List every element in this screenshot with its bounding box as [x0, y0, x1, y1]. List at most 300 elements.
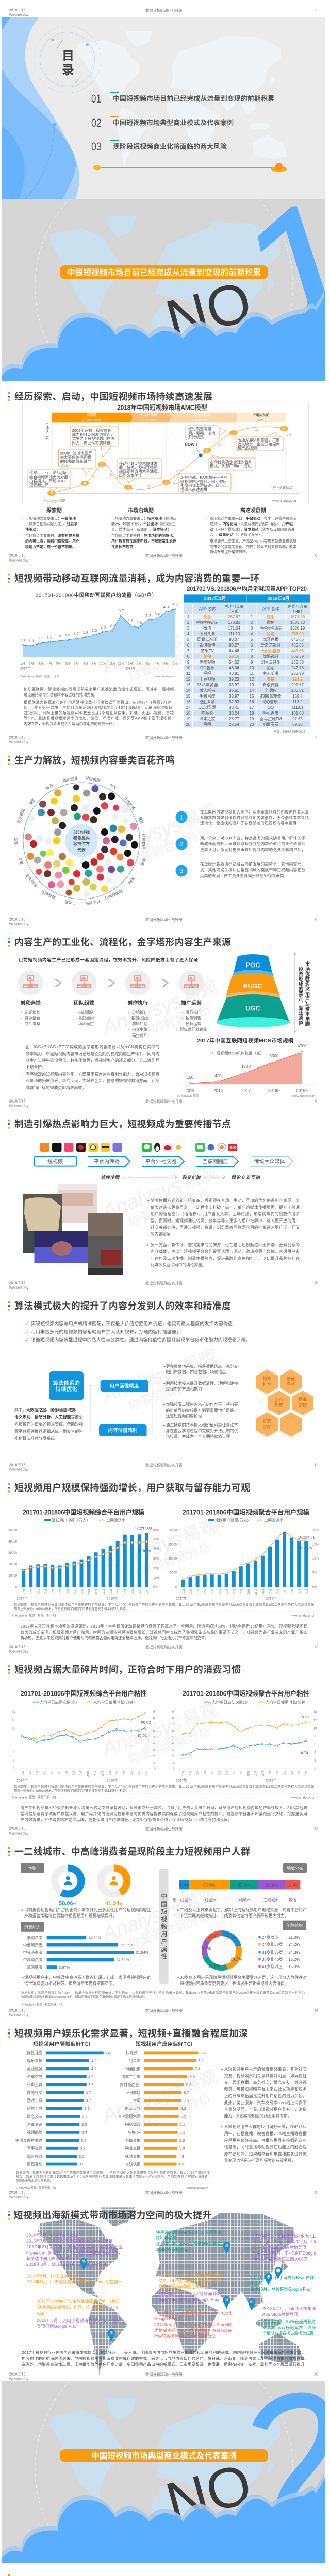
text: region: 二线及以上城市贡献了六成以上的短视频用户地域来源，随着平台用户 [180, 1907, 307, 1912]
area chart: mobile traffic per user: 1.5 [56, 634, 61, 638]
annotations: North America: 2017年8月，LIKE在美国上线 [26, 2274, 81, 2279]
annotations: North America: 其全球注册用户已超过2.4亿 [26, 2256, 78, 2261]
footer: 9 [315, 1098, 317, 1104]
table: APP traffic TOP20: 美拍 [203, 654, 211, 659]
radial diagram: vertical content providers: 教育 [138, 816, 145, 825]
process steps: · [21, 1010, 22, 1014]
AMC chart: 综合视频网站大力发展 [29, 474, 68, 479]
table: APP traffic TOP20: 响屏看看 [262, 722, 279, 727]
data note: © Analysys 易观 · 易观千帆 · A3 [12, 1795, 57, 1799]
annotations: Japan and Korea: 国上线 [250, 2281, 263, 2286]
table: APP traffic TOP20: 9 [187, 660, 189, 665]
data note: 在智能手机上的行为轨迹。 [16, 2178, 53, 2182]
panel: content production [8, 937, 317, 1108]
text block: algorithm measures: 身在自我学习过程中完成对算法机制的优 [166, 1428, 238, 1433]
table: APP traffic TOP20: 9 [251, 660, 253, 665]
footer: 2018/8/15 [9, 1462, 25, 1467]
chart: aggregator platforms users: 12月 [261, 1589, 265, 1596]
text block: spreading analysis: 值表达进入更高层次，一定程度上打破了单一、单向的媒体传播局面，提升了普通 [151, 1205, 300, 1210]
footer: 数据分析驱动业务升级 [145, 1099, 183, 1104]
AMC chart: D [127, 486, 129, 489]
pyramid: PGC PUGC UGC [217, 954, 290, 1027]
stage column: market launch [107, 507, 176, 549]
stage column: exploration: · [22, 517, 23, 520]
gender: donuts: 性别 [28, 1866, 37, 1871]
title: 短视频出海新模式带动市场潜力空间的极大提升 [13, 2210, 211, 2221]
stage column: high growth: · [206, 540, 207, 543]
footer [9, 2008, 318, 2018]
radial diagram: vertical content providers: 财经金融 [85, 775, 101, 783]
AMC chart: 端短视频应用大举涌现， [119, 469, 161, 474]
text block: pyramid analysis: 牌营销目标的完成更加精准高效。 [26, 1084, 86, 1090]
chart: comprehensive platforms users: 8月 [73, 1589, 76, 1594]
panel: AMC development stages: Analysys [98, 423, 185, 473]
text block: traffic analysis: · [19, 700, 20, 705]
process steps: · [74, 1016, 75, 1021]
AMC chart: H [283, 427, 286, 431]
banner: 中国短视频市场典型商业模式及代表案例 [91, 2451, 237, 2461]
region: stacked bar: 三线城市 [263, 1897, 279, 1902]
stage column: exploration: 件驱动； [25, 527, 40, 532]
bar chart: domain TGI: 3.9 [88, 2074, 93, 2079]
chart: aggregator platforms stickiness: 30 [172, 1749, 176, 1752]
footer: 数据分析驱动业务升级 [145, 1463, 183, 1467]
item 02: 中国短视频市场典型商业模式及代表案例 [113, 118, 234, 127]
annotations: North America: 2014年4月，Musical.ly上线 [26, 2233, 78, 2238]
age: donut: 36岁到40岁 [262, 1957, 283, 1962]
map pins [80, 2242, 282, 2342]
process steps: · [182, 1016, 183, 1021]
table: APP traffic TOP20: 4399游戏盒 [260, 693, 282, 699]
panel: algorithm distribution: 你要的数据分析 [127, 1370, 213, 1413]
bar chart: domain TGI: 情侣互动 [27, 2161, 43, 2166]
text block: spreading analysis: 另一方面，有传播、营销需求的品牌方，也在借助短视频这种更新潮、更具创意的 [151, 1242, 300, 1247]
annotations: India and Middle East: Google Play [154, 2316, 178, 2321]
bar chart: domain TGI: 3.2 [81, 2138, 86, 2143]
region: stacked bar: 超一线城市 [173, 1897, 192, 1902]
bar chart: domain TGI: 娱乐直播 [27, 2058, 43, 2063]
table: APP traffic TOP20: 54.52 [229, 660, 239, 665]
chart: aggregator platforms users: 0% [312, 1586, 317, 1589]
footer: 2018/8/15 [9, 1098, 25, 1104]
annotations: India and Middle East: 类榜单中拉力29个国家首位，在Google [154, 2328, 232, 2333]
chart: comprehensive platforms stickiness: 5月 [137, 1771, 140, 1776]
cloud [1, 290, 325, 381]
process steps: 内容审核 [132, 1027, 147, 1032]
annotations: North America: Flipagram；同年11月，今日头条全资收购Musical.ly， [26, 2250, 123, 2256]
table: APP traffic TOP20: 虎牙直播 [262, 637, 279, 642]
table: APP traffic TOP20: 微信 [203, 625, 211, 631]
honeycomb: distribution methods: 营销 [299, 1402, 307, 1408]
chart: aggregator platforms stickiness: 12 [314, 1719, 317, 1722]
AMC chart: 市场认可度 [44, 422, 49, 440]
honeycomb: distribution methods: 投放 [275, 1402, 283, 1408]
annotations: North America [26, 2233, 123, 2284]
AMC chart: IV [147, 485, 151, 488]
age: donut: 24岁到30岁 [262, 1942, 283, 1947]
table: APP traffic TOP20: 2 [187, 620, 189, 625]
table: APP traffic TOP20: 159.8 [292, 694, 303, 699]
AMC chart: 市场发展达到顶峰，厂商 [237, 437, 280, 443]
annotations: India and Middle East: 2018年3月，火山小视频海外版 [158, 2291, 221, 2296]
text block: spreading analysis: 内容载体，主动与短视频平台合作设置话题与活动，邀请视频自媒体、普通用户参 [151, 1249, 300, 1254]
chart: aggregator platforms stickiness: 6月 [218, 1771, 221, 1776]
bar chart: domain TGI [15, 2041, 110, 2167]
region: stacked bar: 22.9% [266, 1883, 278, 1888]
chart: comprehensive platforms users: 50% [153, 1538, 160, 1541]
stage column: exploration: 吸附力不足，商业价值不明晰。 [25, 544, 76, 549]
AMC chart: ©Analysys 易观 [43, 499, 65, 503]
chart: comprehensive platforms users [8, 1509, 160, 1600]
pyramid: PGC PUGC UGC: PUGC [243, 982, 263, 990]
region: stacked bar: 33.9% [203, 1883, 216, 1888]
table: APP traffic TOP20: 233.99 [291, 671, 304, 676]
bar chart: domain TGI: 婚恋交友 [27, 2114, 43, 2119]
footer: 数据分析驱动业务升级 [145, 553, 183, 558]
AMC chart: 拍客模式，带动UGC [29, 478, 65, 483]
stage column: exploration: 的内容生态，消费门槛较高，用户 [25, 539, 79, 543]
text block: pyramid analysis: · [22, 1072, 23, 1077]
text block: technology support [14, 1407, 83, 1441]
area chart: mobile traffic per user: 6月 [65, 662, 70, 666]
chart: aggregator platforms stickiness: 2月 [188, 1771, 192, 1776]
AMC chart: 新产品/应用 [237, 445, 258, 450]
text block: traffic analysis: 移动互联网、智能终端的发展成熟带来用户数据流量的爆炸式增长，而其中，短视频 [24, 687, 174, 691]
chart: aggregator platforms users: 11月 [254, 1589, 257, 1596]
annotations: India and Middle East: 2014年前后，小影海外版Viva Video上线 [154, 2310, 232, 2315]
footer: Wednesday [9, 557, 29, 563]
bar chart: domain TGI: 3.3 [81, 2122, 87, 2127]
table: APP traffic TOP20: 5 [187, 637, 190, 642]
panel: vertical content categories: 你要的数据分析 [127, 825, 213, 868]
chart: MCN market: 1700 [241, 1064, 251, 1069]
text block: technology support: 科技将作为重要的技术支撑，帮助短视 [14, 1421, 83, 1427]
AMC chart: 移动互联网技术快速发 [119, 461, 158, 466]
table: APP traffic TOP20: 10 [250, 666, 254, 670]
panel: traffic consumption [8, 573, 317, 744]
chart: comprehensive platforms users: 0% [153, 1586, 158, 1589]
table: APP traffic TOP20: 20 [186, 722, 191, 727]
stage column: high growth: 高速发展期 [240, 507, 266, 514]
bar chart: app TGI: 5.2 [180, 2106, 186, 2111]
text block: preference analysis: 度不断加深，短视频平台利用直播服务进行流 [224, 2151, 307, 2156]
radial diagram: vertical content providers: 时尚潮流 [24, 873, 38, 888]
text block: algorithm measures: 增强分发过程中的人机协作水平，将内容 [166, 1401, 238, 1406]
chart: comprehensive platforms users: 活跃用户规模（万人） [52, 1518, 90, 1523]
chart: comprehensive platforms users: 50000 [8, 1529, 18, 1532]
bar chart: domain TGI: 3.9 [88, 2082, 93, 2087]
data note: 数据说明：易观千帆只对独立APP中的用户数据进行监测统计，不包括APP之外的调用等行为产生的用户数据。截止2018年第2季度易观千帆基于对22.9亿累计装机覆盖及5.8亿活跃用户的行为监测结果采 [14, 1785, 314, 1789]
central label: user attributes: 中国短视频用户属性 [160, 1893, 168, 1961]
table: APP traffic TOP20: 哔哩哔哩动画 [196, 620, 218, 625]
stage column: high growth: 动（用户习惯形成）、资本驱动（资本及互联网巨头进 [210, 527, 295, 532]
text block: spreading analysis: 与创作及二次传播，制造传播热点，促进品牌的宣传和推广，以此提升品牌在社会 [151, 1256, 300, 1261]
area chart: mobile traffic per user: www.analysys.cn [154, 675, 177, 679]
panel: user stickiness: 你要的数据分析 [127, 1724, 213, 1767]
footer: page 3: 3 [315, 8, 317, 12]
callout 1 [175, 809, 309, 825]
bar chart: domain TGI: 3.7 [86, 2098, 91, 2103]
text: age: 30岁以下用户是现阶段短视频平台主要受众人群，这一部分人群往往对 [180, 1975, 307, 1980]
table: APP traffic TOP20: 美拍 [267, 676, 275, 682]
table: APP traffic TOP20: 13 [186, 683, 190, 687]
table: APP traffic TOP20: （MB） [227, 609, 241, 614]
consumption: bar chart: 消费能力 [24, 1925, 41, 1930]
chart: aggregator platforms stickiness: 2018年 [266, 1777, 277, 1783]
bar chart: domain TGI: 综合视频 [27, 2154, 43, 2159]
panel: hot topic spreading: 你要的数据分析 [127, 1187, 213, 1229]
area chart: mobile traffic per user: 2.0 [92, 628, 97, 633]
area chart: mobile traffic per user: 2.3 [101, 624, 106, 630]
chart: aggregator platforms users: 1月 [268, 1589, 272, 1594]
chart: comprehensive platforms users: 6月 [58, 1589, 62, 1594]
footer: Wednesday [9, 1831, 29, 1835]
process steps: · [21, 1016, 22, 1021]
chart: aggregator platforms users: 16,124.81 [298, 1535, 315, 1539]
area chart: mobile traffic per user: 9月 [92, 662, 97, 666]
data note [21, 1991, 305, 2006]
chart: comprehensive platforms users: 9月 [80, 1589, 84, 1594]
radial diagram: vertical content providers: 容提供方 [73, 841, 90, 846]
annotations: India and Middle East: 最受欢迎App和最佳娱乐App [158, 2284, 211, 2289]
process steps: · [74, 1010, 75, 1014]
data note: 数据说明：易观千帆只对独立APP中的用户数据进行监测统计，不包括APP之外的应用等行为产生的用户数据。截止2018年第2季度 [16, 2171, 210, 2175]
process steps: 选题策划 [25, 1009, 40, 1014]
chart: aggregator platforms users: 15% [312, 1544, 319, 1547]
table: APP traffic TOP20: 新浪微博 [199, 642, 216, 648]
table: APP traffic TOP20: 17 [250, 705, 254, 710]
honeycomb: distribution methods: 定向 [275, 1398, 283, 1403]
chart: aggregator platforms users: 3月 [283, 1589, 286, 1594]
chart: comprehensive platforms users: 10% [153, 1577, 160, 1580]
chart: comprehensive platforms stickiness: 6月 [57, 1771, 60, 1776]
consumption: bar chart: 3.67% [59, 1965, 70, 1970]
chart: comprehensive platforms stickiness: 30 [153, 1749, 157, 1752]
text block: spreading analysis: 随着传播方式的新一轮变革，短视频在直观、生动、互动的优势使得内容表现、价 [151, 1198, 300, 1203]
area chart: mobile traffic per user: 4.0 [163, 605, 169, 609]
chart: comprehensive platforms users: 10000 [8, 1574, 18, 1578]
AMC chart: 场进入高速发展 [180, 486, 208, 492]
AMC chart: 泛认可 [60, 463, 72, 468]
AMC chart: F [206, 449, 208, 452]
text block: algorithm measures: ➢ [162, 1381, 166, 1386]
area chart: mobile traffic per user: © Analysys 易观 · 国家工信部 [20, 674, 59, 679]
callout 2: 断成长而提升，垂直领域短视频的内容价值和商业价值得到 [200, 841, 305, 846]
table: APP traffic TOP20: APP 名称 [262, 606, 279, 611]
panel: AMC development stages [8, 391, 317, 563]
checklist: ✓ [25, 1329, 29, 1334]
table: APP traffic TOP20: 90.07 [229, 637, 239, 642]
table: APP traffic TOP20: 10 [186, 666, 191, 670]
footer: Wednesday [9, 1285, 29, 1290]
text block: spreading analysis [146, 1198, 300, 1267]
process steps: 场地确定 [78, 1021, 94, 1026]
checklist: ✓ [25, 1321, 29, 1326]
process steps: 拍摄/动画 [131, 1015, 148, 1021]
bar chart: domain TGI: 异性社交 [27, 2050, 43, 2055]
text block: overseas summary: 内容创作的新航海时代到来。中国短视频平台出海以收购或自建的方式，辅之以与当地内容伙伴的合作，将日韩、东南亚、俄语国家以及北美作为重点市场区域， [22, 2356, 308, 2361]
area chart: mobile traffic per user: 4月 [155, 662, 160, 666]
chart: aggregator platforms stickiness: 12月 [261, 1771, 264, 1777]
annotations: South America: 2017年Google Play全球最佳应用榜单，LIKE [37, 2299, 119, 2304]
bar chart: app TGI: 5.2 [180, 2114, 186, 2119]
text: consumption: ➢ [21, 1975, 24, 1980]
annotations: India and Middle East [154, 2272, 232, 2338]
footer: Wednesday [9, 921, 29, 926]
chart: aggregator platforms stickiness: 8月 [232, 1771, 235, 1776]
annotations: South America: 登顶巴西Google Play [37, 2324, 77, 2329]
callout 1: 1 [180, 814, 184, 821]
AMC chart: 探索期 [87, 412, 97, 417]
stage column: market launch: · [107, 517, 108, 520]
chart: aggregator platforms users: 15000 [168, 1544, 177, 1547]
data note: 易观千帆基于对22.9亿累计装机覆盖及5.8亿活跃用户的行为监测结果采用自主研发的enfoTech技术，帮助您有效了解数字消费者 [16, 2175, 208, 2179]
table: APP traffic TOP20: 483.65 [291, 643, 304, 648]
callout 3 [175, 861, 305, 878]
table: APP traffic TOP20: 15 [250, 694, 254, 699]
chart: comprehensive platforms users: 201701-201806中国短视频综合平台用户规模 [23, 1509, 144, 1516]
big number 1 [258, 206, 325, 311]
chart: comprehensive platforms stickiness: 人均单日使用时长(分钟) [93, 1700, 135, 1705]
AMC chart: 冰桶挑战、PAPI酱等一系列 [180, 474, 228, 480]
footer: 8 [315, 917, 317, 921]
age: donut: 41岁及以上 [262, 1964, 283, 1969]
area chart: mobile traffic per user: 2月 [29, 662, 34, 666]
table: APP traffic TOP20: 200.81 [291, 688, 304, 693]
region: stacked bar: 一线城市 [201, 1897, 216, 1902]
area chart: mobile traffic per user: 5月 [163, 662, 169, 666]
chart: aggregator platforms stickiness: 3月 [283, 1771, 286, 1776]
annotations: Japan and Korea [250, 2233, 317, 2292]
footer: 2018/8/15 [9, 1826, 25, 1831]
data note [12, 1603, 318, 1618]
AMC chart: E [165, 481, 168, 484]
age: donut: 24.2% [230, 1957, 242, 1962]
flow: spreading steps: 平台内传播 [94, 1158, 120, 1165]
box: user portrait accuracy [101, 1380, 148, 1392]
bar chart: domain TGI: 汽车资讯 [27, 2122, 43, 2127]
table: APP traffic TOP20: 64.46 [229, 649, 239, 653]
consumption: bar chart: 31.54% [136, 1950, 149, 1955]
table: APP traffic TOP20: 快手 [267, 614, 275, 619]
text block: technology support: 能化算法推荐分发系统。 [14, 1436, 59, 1441]
banner [60, 265, 268, 279]
annotations: North America: 2018年8月，Musical.ly宣布和Tik Tok合并 [26, 2262, 107, 2267]
text block: algorithm measures [162, 1364, 238, 1439]
area chart: mobile traffic per user: 4.2 [172, 602, 178, 606]
stage column: exploration: · [22, 534, 23, 538]
panel: user scale [8, 1482, 319, 1654]
footer [9, 917, 317, 926]
footer: 6 [315, 553, 317, 557]
chart: aggregator platforms stickiness: 80 [172, 1717, 176, 1720]
chart: aggregator platforms users: 5000 [170, 1571, 177, 1574]
table: APP traffic TOP20: 户均月流量 [288, 604, 307, 609]
table: APP traffic TOP20: 2345浏览器 [197, 682, 218, 687]
table: APP traffic TOP20: 5 [251, 637, 253, 642]
text: consumption [21, 1975, 151, 1986]
table: APP traffic TOP20: 242.78 [291, 666, 304, 670]
flow: spreading steps [34, 1157, 293, 1166]
bar chart: domain TGI: 商务社交 [27, 2090, 43, 2095]
chart: aggregator platforms stickiness: 6.74 [301, 1751, 308, 1755]
AMC chart: 突发事件使得视频 [60, 454, 91, 460]
chart: aggregator platforms users: 2018年 [266, 1596, 277, 1600]
text block: stickiness analysis: 型泛娱乐消费领域用户数据来看，用户碎片化的使用习惯和丰富的优质内容提供共同促成了短视频用户粘性的提升。短视频平台要不断紧跟流行文化，挖掘更多用 [21, 1811, 307, 1816]
connector lines [84, 1372, 153, 1437]
area chart: mobile traffic per user: 4月 [47, 662, 52, 666]
chart: comprehensive platforms users: 4月 [130, 1589, 134, 1594]
text: region: ➢ [176, 1908, 180, 1912]
panel: entertainment preference: 易观 [180, 2066, 220, 2097]
data note [12, 1785, 318, 1799]
chart: aggregator platforms stickiness: 11月 [254, 1771, 257, 1777]
footer: 13 [314, 1826, 318, 1831]
AMC chart: VII [255, 430, 259, 433]
table: APP traffic TOP20: 14 [250, 688, 254, 693]
bar chart: domain TGI: 美业服务 [27, 2066, 43, 2071]
age: donut: 24.3% [208, 1964, 220, 1968]
text block: stickiness analysis: 户内容需求，不仅需要精准定位品牌，更要深谙用户内容偏好、发挥短视频商业价值，保证短视频平台的良性持续发展。 [21, 1818, 232, 1822]
consumption: bar chart: 低消费者 [27, 1935, 43, 1940]
area chart: mobile traffic per user: 1.8 [83, 630, 88, 635]
text block: algorithm measures: ➢ [162, 1364, 166, 1369]
annotations: Russia: 卓和iOS双榜领军 [156, 2247, 188, 2252]
text block: preference analysis: 此外，美业服务、汽车交易等O2O线上消费平 [224, 2100, 307, 2105]
callout 2: 用户分众，对小众内容、特定品类的需求随着用户群体的不 [200, 836, 305, 841]
text block: preference analysis: ➢ [220, 2067, 224, 2072]
bar chart: domain TGI: 铃声工具 [27, 2082, 43, 2087]
text block: preference analysis: 能力，并形成较明显的线上消费习惯。 [224, 2113, 291, 2119]
chart: aggregator platforms users: 4月 [203, 1589, 207, 1594]
chart: comprehensive platforms users: 2月 [29, 1589, 32, 1594]
text block: stickiness analysis: 用户在短视频类APP消费时长与人均单日启动次数虽有波动，但是依然处于高位，占据了用户的大量碎片时间，可见用户对短视频内容的依赖性较大。相比其他典 [21, 1805, 307, 1810]
chart: comprehensive platforms stickiness: 12 [12, 1719, 15, 1722]
chart: aggregator platforms stickiness: 6 [314, 1743, 316, 1747]
area chart: mobile traffic per user: 10月 [100, 662, 107, 666]
callout 3: 在泛娱乐各版块不断融合向前发展的趋势下，其他内容形 [200, 861, 301, 867]
area chart: mobile traffic per user: 3.3 [145, 613, 151, 617]
bar chart: app TGI: 省钱快报 [125, 2161, 141, 2166]
footer: 数据分析驱动业务升级 [145, 2008, 183, 2013]
process steps: · [128, 1010, 129, 1014]
annotations: Southeast Asia: 2018年1月，Tik Tok在泰国 [262, 2306, 316, 2311]
text block: algorithm measures: 过程中的方法和能力 [166, 1386, 202, 1391]
flow: linear spreading: 裂变扩散 [182, 1175, 202, 1180]
box: user portrait accuracy: 用户画像精度 [109, 1383, 139, 1389]
decorative world map [76, 31, 288, 169]
radial diagram: vertical content providers: 摄影 [28, 796, 37, 806]
area chart: mobile traffic per user: 6月 [173, 662, 177, 666]
chart: comprehensive platforms users: 20% [153, 1567, 160, 1570]
chart: comprehensive platforms users: 6月 [145, 1589, 148, 1594]
process steps: · [182, 1022, 183, 1026]
text block: overseas summary: 在海外市场取得突破性进展，成为继华为等硬件厂商之后，中国移动产品出海的新模式。但市场要想进一步发展，仍需在内容、技术、盈利等多个层面进行提升。 [22, 2362, 308, 2367]
annotations: Southeast Asia: 个星期在排名榜占据榜首位置 [262, 2331, 314, 2336]
chart: comprehensive platforms stickiness: 10月 [86, 1771, 89, 1777]
area chart: mobile traffic per user [20, 591, 178, 679]
chart: comprehensive platforms stickiness: 2月 [115, 1771, 119, 1776]
chart: aggregator platforms users: 20% [312, 1529, 319, 1532]
process steps: · [21, 1022, 22, 1026]
annotations: Southeast Asia: 安卓和ios双榜冠军并连续多 [262, 2325, 316, 2330]
chart: aggregator platforms users: 6月 [305, 1589, 308, 1594]
annotations: North America: 2018年1月，LIKE登顶美国社交榜App Store总榜第一 [26, 2279, 122, 2284]
stage column: exploration [22, 507, 79, 549]
checklist: 利用丰富多元的短视频内容帮助用户扩大认知视野，打通内容传播壁垒； [31, 1329, 181, 1334]
panel: ad monetisation divider [8, 2574, 10, 2576]
honeycomb: distribution methods: 猜你 [287, 1377, 295, 1382]
